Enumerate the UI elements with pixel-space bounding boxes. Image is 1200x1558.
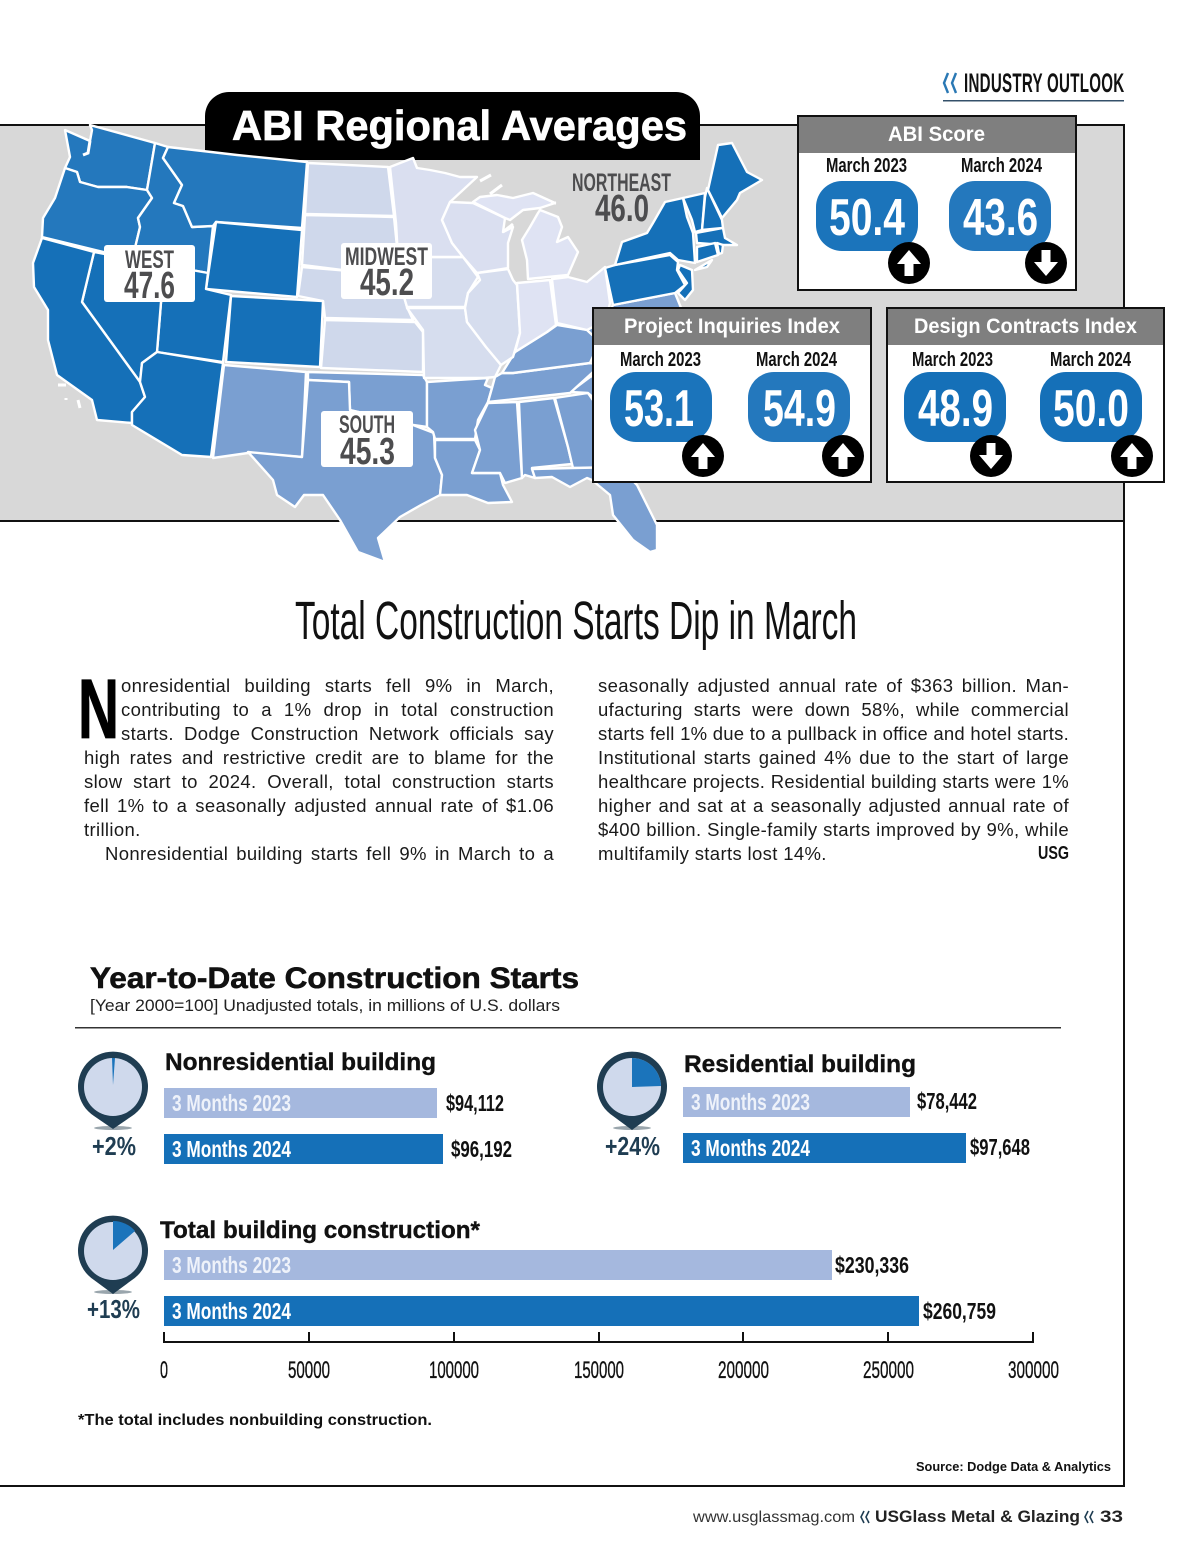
text: starts fell 1% due to a pullback in office and hotel starts. [598, 723, 1069, 744]
icon: pie pin +2% [78, 1052, 148, 1130]
panel: project inquiries index: March 2024 [756, 349, 838, 371]
x axis [160, 1332, 1059, 1384]
text: healthcare projects. Residential building starts were 1% [598, 771, 1069, 792]
bar: 3 months 2024: 3 Months 2024 [172, 1298, 291, 1324]
label: south 45.3: 45.3 [340, 431, 395, 473]
label: midwest 45.2: 45.2 [360, 262, 414, 304]
text: fell 1% to a seasonally adjusted annual rate of $1.06 [84, 795, 554, 816]
text: onresidential building starts fell 9% in March, [121, 675, 554, 696]
bar: 3 months 2024 [164, 1134, 512, 1164]
score pill: 54.9 [748, 372, 850, 442]
panel: ABI score: March 2023 [826, 155, 907, 177]
bar: 3 months 2024 [164, 1296, 996, 1326]
icon: pie pin +24% [597, 1052, 667, 1130]
bar: 3 months 2023: 3 Months 2023 [172, 1252, 291, 1278]
bar: 3 months 2023: $94,112 [446, 1090, 504, 1116]
map region: west [42, 125, 307, 273]
label: west 47.6: WEST [125, 246, 174, 274]
great lakes islands and peninsulas [480, 175, 556, 232]
map of United States by region [33, 125, 762, 562]
bar: 3 months 2023: $78,442 [917, 1088, 977, 1114]
icon: down arrow [1025, 242, 1067, 284]
icon: down arrow [970, 435, 1012, 477]
panel: design contracts index: March 2024 [1050, 349, 1132, 371]
score pill: 53.1: 53.1 [624, 380, 694, 438]
heading: total building construction: Total building construction* [160, 1217, 481, 1244]
icon: pie pin +13% [78, 1216, 148, 1294]
heading: total construction starts dip in March: Total Construction Starts Dip in March [295, 591, 857, 651]
bar: 3 months 2023: 3 Months 2023 [691, 1089, 810, 1115]
panel: gray map background [0, 125, 1124, 521]
drop cap N: N [78, 662, 119, 756]
title: ABI Regional Averages: ABI Regional Averages [232, 102, 687, 149]
bar: 3 months 2023 [164, 1250, 909, 1280]
text: higher and sat at a seasonally adjusted annual rate of [598, 795, 1069, 816]
text: multifamily starts lost 14%. [598, 843, 827, 864]
text: trillion. [84, 819, 141, 840]
x axis: 0 [160, 1357, 168, 1384]
bar: 3 months 2024 [683, 1133, 1030, 1163]
panel: project inquiries index: Project Inquiries Index [624, 315, 840, 338]
panel: project inquiries index: March 2023 [620, 349, 701, 371]
icon: up arrow [822, 435, 864, 477]
label: midwest 45.2: MIDWEST [345, 243, 428, 271]
text: Institutional starts gained 4% due to the start of large [598, 747, 1069, 768]
bar: 3 months 2024: $260,759 [923, 1298, 996, 1324]
panel: project inquiries index [593, 308, 871, 482]
section header: industry outlook: INDUSTRY OUTLOOK [964, 67, 1124, 98]
footer: www.usglassmag.com [692, 1509, 855, 1526]
change: +24%: +24% [605, 1131, 660, 1161]
footer: 33 [1100, 1507, 1123, 1526]
icon: up arrow [682, 435, 724, 477]
bar: 3 months 2023 [164, 1088, 504, 1118]
panel: design contracts index [887, 308, 1164, 482]
label: midwest 45.2 [341, 243, 432, 304]
x axis: 200000 [718, 1357, 769, 1384]
bar: 3 months 2024: $96,192 [451, 1136, 512, 1162]
subheading: units: [Year 2000=100] Unadjusted totals, in millions of U.S. dollars [90, 996, 560, 1015]
text: slow start to 2024. Overall, total construction starts [84, 771, 554, 792]
x axis: 50000 [288, 1357, 330, 1384]
score pill: 50.4: 50.4 [829, 189, 905, 247]
label: south 45.3: SOUTH [339, 411, 395, 439]
score pill: 50.0: 50.0 [1053, 380, 1129, 438]
chart group: nonresidential building [78, 1049, 512, 1164]
label: west 47.6 [104, 245, 195, 307]
score pill: 43.6 [949, 181, 1051, 251]
heading: residential building: Residential building [684, 1051, 916, 1078]
panel: ABI score: ABI Score [888, 123, 985, 146]
text: $400 billion. Single-family starts improved by 9%, while [598, 819, 1069, 840]
label: west 47.6: 47.6 [124, 265, 175, 307]
bar: 3 months 2024: 3 Months 2024 [691, 1135, 810, 1161]
panel: design contracts index: Design Contracts Index [914, 315, 1137, 338]
text block: left column article [84, 675, 554, 864]
label: northeast 46.0: NORTHEAST [572, 169, 671, 197]
text: contributing to a 1% drop in total construction [121, 699, 554, 720]
byline: USG: USG [1038, 843, 1069, 863]
bar: 3 months 2024: 3 Months 2024 [172, 1136, 291, 1162]
score pill: 48.9 [904, 372, 1006, 442]
score pill: 54.9: 54.9 [763, 380, 836, 438]
california islands [58, 385, 80, 408]
x axis: 300000 [1008, 1357, 1059, 1384]
chart group: residential building [597, 1051, 1030, 1163]
bar: 3 months 2023: 3 Months 2023 [172, 1090, 291, 1116]
heading: nonresidential building: Nonresidential building [165, 1049, 436, 1076]
text: starts. Dodge Construction Network officials say [121, 723, 554, 744]
footnote: *The total includes nonbuilding construction. [78, 1412, 432, 1429]
bar: 3 months 2023: $230,336 [835, 1252, 909, 1278]
map region: south [213, 293, 690, 562]
bar: 3 months 2023 [683, 1087, 977, 1117]
label: northeast 46.0 [572, 169, 671, 230]
icon: up arrow [888, 242, 930, 284]
footer: USGlass Metal & Glazing [875, 1507, 1080, 1526]
score pill: 43.6: 43.6 [963, 189, 1038, 247]
change: +13%: +13% [87, 1294, 140, 1324]
text: high rates and restrictive credit are to blame for the [84, 747, 554, 768]
source note: Source: Dodge Data & Analytics [916, 1459, 1111, 1474]
text: seasonally adjusted annual rate of $363 billion. Man- [598, 675, 1069, 696]
label: south 45.3 [321, 411, 413, 473]
map region: midwest [298, 158, 610, 378]
label: northeast 46.0: 46.0 [595, 188, 649, 230]
footer [692, 1507, 1123, 1526]
panel: ABI score: March 2024 [961, 155, 1043, 177]
panel: ABI score [798, 116, 1076, 290]
score pill: 50.0 [1040, 372, 1142, 442]
x axis: 150000 [574, 1357, 624, 1384]
x axis: 100000 [429, 1357, 479, 1384]
change: +2%: +2% [92, 1131, 136, 1161]
score pill: 53.1 [610, 372, 712, 442]
text block: right column article [598, 675, 1069, 864]
text: Nonresidential building starts fell 9% in March to a [105, 843, 554, 864]
map region: northeast [605, 143, 762, 305]
x axis: 250000 [863, 1357, 914, 1384]
chart group: total building construction [78, 1216, 1059, 1384]
heading: year-to-date construction starts: Year-to-Date Construction Starts [90, 962, 579, 995]
title: ABI Regional Averages [205, 92, 700, 160]
panel: design contracts index: March 2023 [912, 349, 993, 371]
text: ufacturing starts were down 58%, while commercial [598, 699, 1069, 720]
score pill: 50.4 [816, 181, 918, 251]
bar: 3 months 2024: $97,648 [970, 1134, 1030, 1160]
score pill: 48.9: 48.9 [918, 380, 993, 438]
icon: up arrow [1111, 435, 1153, 477]
